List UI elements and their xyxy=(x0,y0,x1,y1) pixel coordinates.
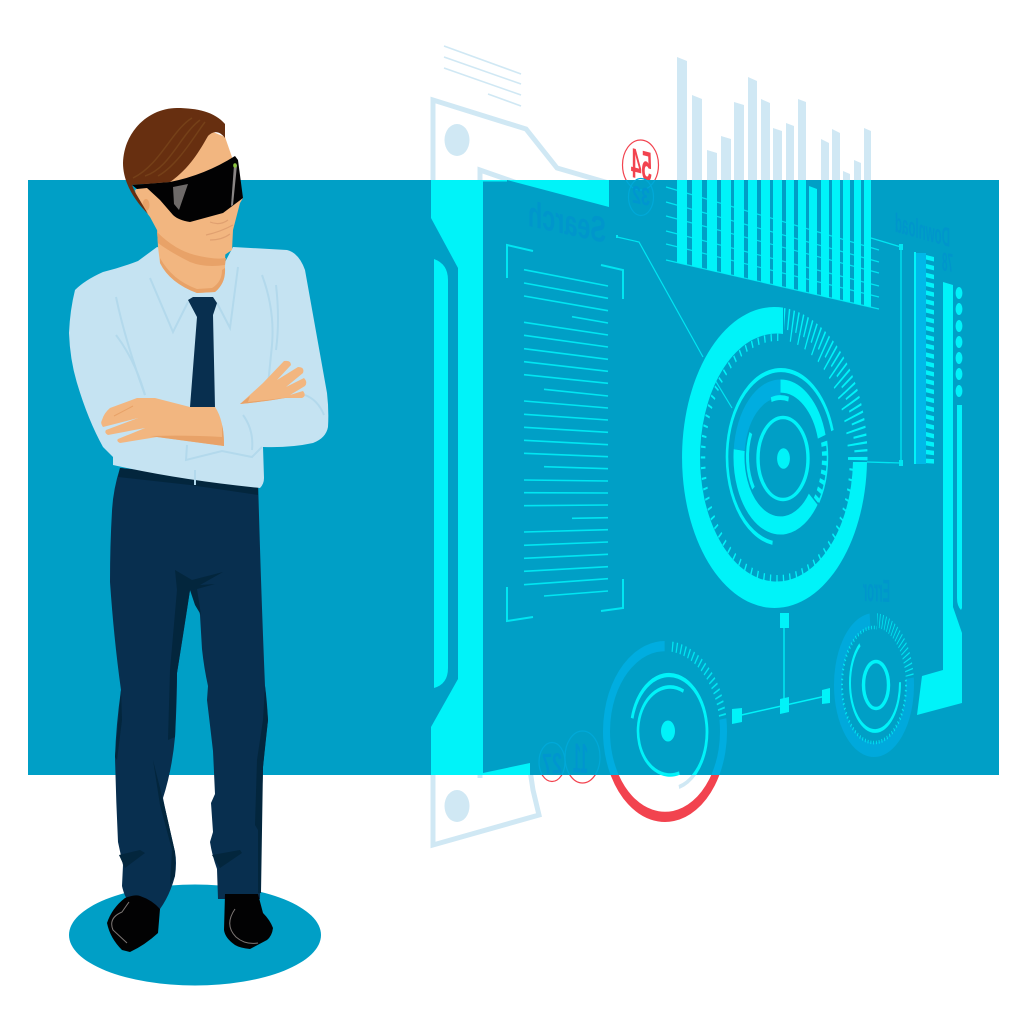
glasses side strip xyxy=(231,165,237,206)
download level meter xyxy=(914,252,934,464)
badge 11 xyxy=(565,731,600,783)
holographic interface: Error xyxy=(863,572,890,609)
cyan frame right xyxy=(917,282,962,715)
neck shadow xyxy=(157,232,226,293)
main dial xyxy=(682,307,867,608)
lower left dial centre xyxy=(661,720,675,742)
badge 54: 54 xyxy=(631,139,652,192)
glasses reflection xyxy=(173,184,188,210)
lower left dial xyxy=(603,641,727,822)
search label: Search xyxy=(528,193,606,251)
lower right dial dotted ring xyxy=(842,627,906,743)
lower left dial band xyxy=(603,641,727,822)
background panel xyxy=(28,180,999,775)
badge 32 xyxy=(628,178,654,216)
status dots xyxy=(956,287,962,397)
trouser shadows xyxy=(115,468,268,893)
holographic interface: 78 xyxy=(942,246,953,278)
holographic interface: Download xyxy=(895,207,950,253)
hair xyxy=(123,108,225,214)
badge 11: 11 xyxy=(573,734,588,782)
neck xyxy=(157,228,226,293)
shoe right xyxy=(224,894,273,949)
trousers xyxy=(110,468,268,909)
lower right dial ticks xyxy=(877,613,914,677)
download connectors xyxy=(867,238,903,466)
shirt xyxy=(69,247,328,488)
pale header lines xyxy=(444,46,521,106)
main dial inner rings xyxy=(719,358,843,556)
bar chart pale tops xyxy=(677,57,871,180)
floor ellipse xyxy=(69,884,321,986)
main dial thick ring xyxy=(682,307,867,608)
shirt folds xyxy=(116,267,324,485)
search list lines xyxy=(524,270,608,596)
forearm and left hand xyxy=(101,398,224,446)
bar chart cyan bars xyxy=(677,180,871,307)
head xyxy=(123,108,243,258)
main dial long ticks xyxy=(784,308,868,460)
search list brackets xyxy=(507,245,623,621)
mouth and nose xyxy=(206,220,233,240)
man in VR glasses xyxy=(69,108,328,952)
vr glasses xyxy=(132,156,243,222)
badge 27: 27 xyxy=(542,748,562,781)
main dial centre xyxy=(777,448,790,469)
bar chart grid xyxy=(666,187,879,309)
main dial short ticks xyxy=(703,337,852,579)
ear detail xyxy=(142,199,150,211)
holographic interface xyxy=(431,46,962,845)
tie xyxy=(188,297,217,407)
network connector xyxy=(732,613,830,724)
glasses indicator light xyxy=(233,163,237,168)
hair highlights xyxy=(133,118,205,178)
badge 54 xyxy=(622,139,658,192)
cyan frame left xyxy=(431,180,609,775)
lower right dial arcs xyxy=(850,634,900,732)
connector from search to main dial xyxy=(616,235,732,408)
lower right dial band xyxy=(834,614,914,756)
badge 32: 32 xyxy=(632,181,650,212)
ear and face xyxy=(135,132,243,258)
lower right dial xyxy=(834,614,914,756)
pale frame top xyxy=(433,100,612,845)
shoe left xyxy=(107,895,160,952)
lower left dial arcs xyxy=(630,672,708,789)
lower left dial ticks xyxy=(672,642,726,717)
badge 27 xyxy=(539,742,565,782)
forearm and right hand xyxy=(240,361,306,404)
